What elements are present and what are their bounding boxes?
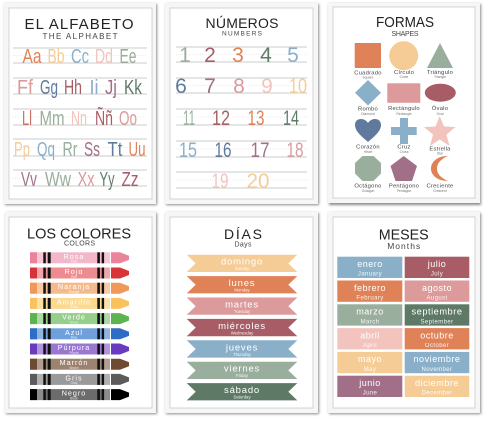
banner: viernes: viernes [224,364,260,375]
alphabet letters: Hh [64,77,82,99]
month: noviembre: noviembre [414,354,460,364]
crayon: purpura [30,343,129,355]
shape: star [424,116,456,156]
month: diciembre: December [422,391,452,397]
alphabet letters: Ww [45,169,71,191]
shape: octagon: Octágono [354,184,382,190]
shape: square: Cuadrado [354,70,382,76]
numbers 1 to 20: 19 [212,170,228,193]
shape: diamond: Diamond [361,112,375,116]
month: enero: January [358,272,382,278]
banner: jueves: jueves [225,342,258,353]
numbers 1 to 20: 7 [204,75,216,98]
numbers 1 to 20: 16 [214,139,232,162]
banner: sabado [187,383,297,400]
banner: martes: martes [225,300,259,310]
banner: lunes: Monday [234,288,250,293]
crayon: rosa [30,252,129,264]
numbers 1 to 20: 20 [246,170,270,193]
shape: pentagon: Pentagon [397,189,411,193]
alphabet letters: Ññ [95,106,113,130]
month: septiembre: septiembre [412,307,462,317]
shape: octagon: Octagon [362,189,375,193]
shape: triangle [427,43,453,79]
heading: los colores: LOS COLORES [27,226,131,243]
crayon: negro: Negro [62,389,86,398]
crayon: naranja: Naranja [58,282,90,291]
banner: sabado: sábado [224,385,260,396]
month: marzo [337,304,402,326]
crayon: marron [30,358,129,370]
crayon: rojo [30,267,129,279]
month: agosto: August [426,296,448,302]
crayon: rojo: Red [71,275,77,279]
alphabet letters: Cc [71,46,89,68]
alphabet letters [14,46,146,191]
crayon: rojo: Rojo [65,267,83,276]
month: junio [337,376,402,397]
month: diciembre: diciembre [415,378,459,388]
shape: circle: Circle [400,75,408,79]
subheading: months: Months [387,241,420,251]
numbers 1 to 20: 1 [179,44,191,67]
alphabet letters: Jj [105,77,117,99]
month: julio: July [431,272,443,278]
month: septiembre: September [421,319,453,325]
numbers 1 to 20: 6 [175,75,187,98]
numbers 1 to 20: 4 [260,44,272,67]
month: julio [405,257,469,278]
banner: lunes: lunes [229,278,255,289]
month: abril [337,328,402,349]
month: febrero: febrero [354,283,386,293]
crayon: marron: Brown [69,366,79,370]
banner: viernes [187,362,297,379]
crayon: marron: Marrón [60,358,88,367]
shape: triangle: Triangle [434,75,446,79]
month: abril: April [363,343,377,349]
numbers 1 to 20: 2 [204,44,216,67]
month: junio: June [363,391,378,397]
alphabet letters: Ii [90,77,98,99]
numbers 1 to 20: 12 [212,107,230,130]
heading: numeros: NÚMEROS [206,15,278,31]
alphabet letters: Nn [71,108,87,130]
panel: meses [328,212,481,414]
shape: octagon [354,156,382,193]
crayon: purpura: Purple [69,351,79,355]
crayon: verde: Green [70,320,79,324]
crayon: negro [30,389,129,400]
crayon: azul: Azul [65,328,83,337]
shape: crescent [426,156,454,193]
month: noviembre [405,352,469,373]
banner: domingo: domingo [221,257,263,268]
crayon: azul: Blue [71,336,77,340]
alphabet letters: Gg [40,77,58,99]
alphabet letters: Tt [108,139,123,161]
month: febrero: February [356,296,384,302]
crayon: naranja: Orange [69,290,80,294]
alphabet letters: Rr [62,139,78,161]
numbers 1 to 20: 11 [183,107,195,130]
month: julio: julio [427,259,446,269]
crayon: amarillo: Amarillo [57,297,91,306]
subheading: numbers: NUMBERS [222,30,263,38]
month: febrero [337,280,402,302]
heading: meses: MESES [379,227,429,244]
shape: oval: Óvalo [432,105,448,112]
shape: pentagon: Pentágono [389,184,419,190]
crayon: naranja [30,282,129,294]
heading: formas: FORMAS [376,14,434,31]
shape: crescent: Crescent [433,189,447,193]
alphabet letters: Aa [22,46,42,68]
crayon: rosa: Rosa [64,252,84,261]
banner: viernes: Friday [236,373,249,378]
shape: oval [425,84,456,116]
crayon: gris: Gris [65,373,83,382]
numbers 1 to 20: 18 [286,139,304,162]
shape: cross [391,118,417,154]
numbers 1 to 20: 9 [261,75,273,98]
panel: dias [165,212,319,414]
shape: crescent: Creciente [426,184,454,190]
numbers 1 to 20: 10 [289,75,307,98]
shape: rectangle: Rectangle [396,112,412,116]
heading: dias: DÍAS [224,226,262,242]
shape: star: Star [437,152,444,156]
shape: heart [355,119,381,154]
banner: domingo: Sunday [235,266,250,271]
numbers 1 to 20: 13 [248,107,264,130]
crayon: amarillo: Yellow [69,305,79,309]
banner: miercoles: miércoles [218,321,266,332]
banner: jueves: Thursday [233,352,252,357]
month: marzo: marzo [356,307,384,317]
month: enero [337,257,402,278]
alphabet letters: Bb [48,46,64,68]
alphabet letters: Pp [14,139,30,161]
numbers 1 to 20: 5 [287,44,299,67]
month: mayo: May [364,367,376,373]
subheading: shapes: SHAPES [392,31,419,38]
alphabet letters: Ff [17,77,33,99]
subheading: colors: COLORS [64,240,95,248]
banner: miercoles [187,319,297,336]
shape: square [354,43,382,80]
numbers 1 to 20: 3 [232,44,244,67]
month: mayo [337,352,402,373]
alphabet letters: Vv [21,169,37,191]
alphabet letters: Zz [122,169,138,191]
crayon: negro: Black [70,396,78,400]
shape: triangle: Triángulo [427,70,453,76]
alphabet letters: Uu [128,139,146,161]
month: noviembre: November [422,367,452,373]
banner: sabado: Saturday [233,395,251,400]
panel: los colores [5,212,157,414]
panel: numeros [165,3,319,205]
shape: pentagon [389,156,419,193]
crayon: amarillo [30,297,129,309]
crayon: gris: Gray [71,381,78,385]
month: agosto [405,280,469,302]
shape: diamond [355,80,381,116]
numbers 1 to 20: 14 [283,107,299,130]
month: enero: enero [357,259,383,269]
alphabet letters: Ee [120,46,136,68]
banner: jueves [187,340,297,358]
numbers 1 to 20: 15 [179,139,197,162]
month: octubre: octubre [420,330,454,340]
panel: el alfabeto [4,3,157,205]
crayon: gris [30,373,129,385]
heading: el alfabeto: EL ALFABETO [24,16,134,33]
month: octubre [405,328,469,349]
shape: cross: Cross [400,150,409,154]
alphabet letters: Oo [119,108,137,130]
shape: rectangle [387,83,420,116]
numbers 1 to 20: 17 [250,139,270,162]
shape: circle: Círculo [394,70,414,76]
month: octubre: October [425,343,449,349]
month: marzo: March [361,319,379,325]
shape: star: Estrella [429,146,451,152]
numbers 1 to 20: 8 [233,75,245,98]
alphabet letters: Xx [78,169,94,191]
crayon: azul [30,328,129,340]
banner: miercoles: Wednesday [231,330,254,335]
alphabet letters: Yy [100,169,114,191]
banner: martes [187,298,297,315]
month: junio: junio [358,378,381,388]
crayon: verde: Verde [62,313,86,322]
numbers 1 to 20 [175,44,307,193]
banner: martes: Tuesday [234,309,251,314]
month: abril: abril [360,330,380,340]
shape: rectangle: Rectángulo [388,106,420,112]
shape: heart: Heart [364,150,372,154]
shape: heart: Corazón [356,144,380,150]
alphabet letters: Mm [40,108,64,130]
subheading: days: Days [234,242,252,249]
crayon: verde [30,313,129,324]
alphabet letters: Dd [95,46,113,68]
panel: formas [328,3,481,205]
shape: circle [389,41,418,79]
subheading: the alphabet: THE ALPHABET [42,32,118,41]
alphabet letters: Ss [84,139,100,161]
month: septiembre [405,304,469,326]
shape: square: Square [363,76,374,80]
alphabet letters: Kk [124,77,143,99]
alphabet letters: Qq [37,139,55,161]
shape: oval: Oval [437,112,444,116]
month: mayo: mayo [358,354,382,364]
month: diciembre [405,376,469,397]
month: agosto: agosto [422,283,452,293]
shape: diamond: Rombo [358,106,378,112]
banner: domingo [187,255,297,272]
shape: cross: Cruz [397,144,411,150]
crayon: rosa: Pink [71,260,78,264]
crayon: purpura: Púrpura [58,343,90,352]
banner: lunes [187,276,297,293]
alphabet letters: Ll [22,108,32,130]
